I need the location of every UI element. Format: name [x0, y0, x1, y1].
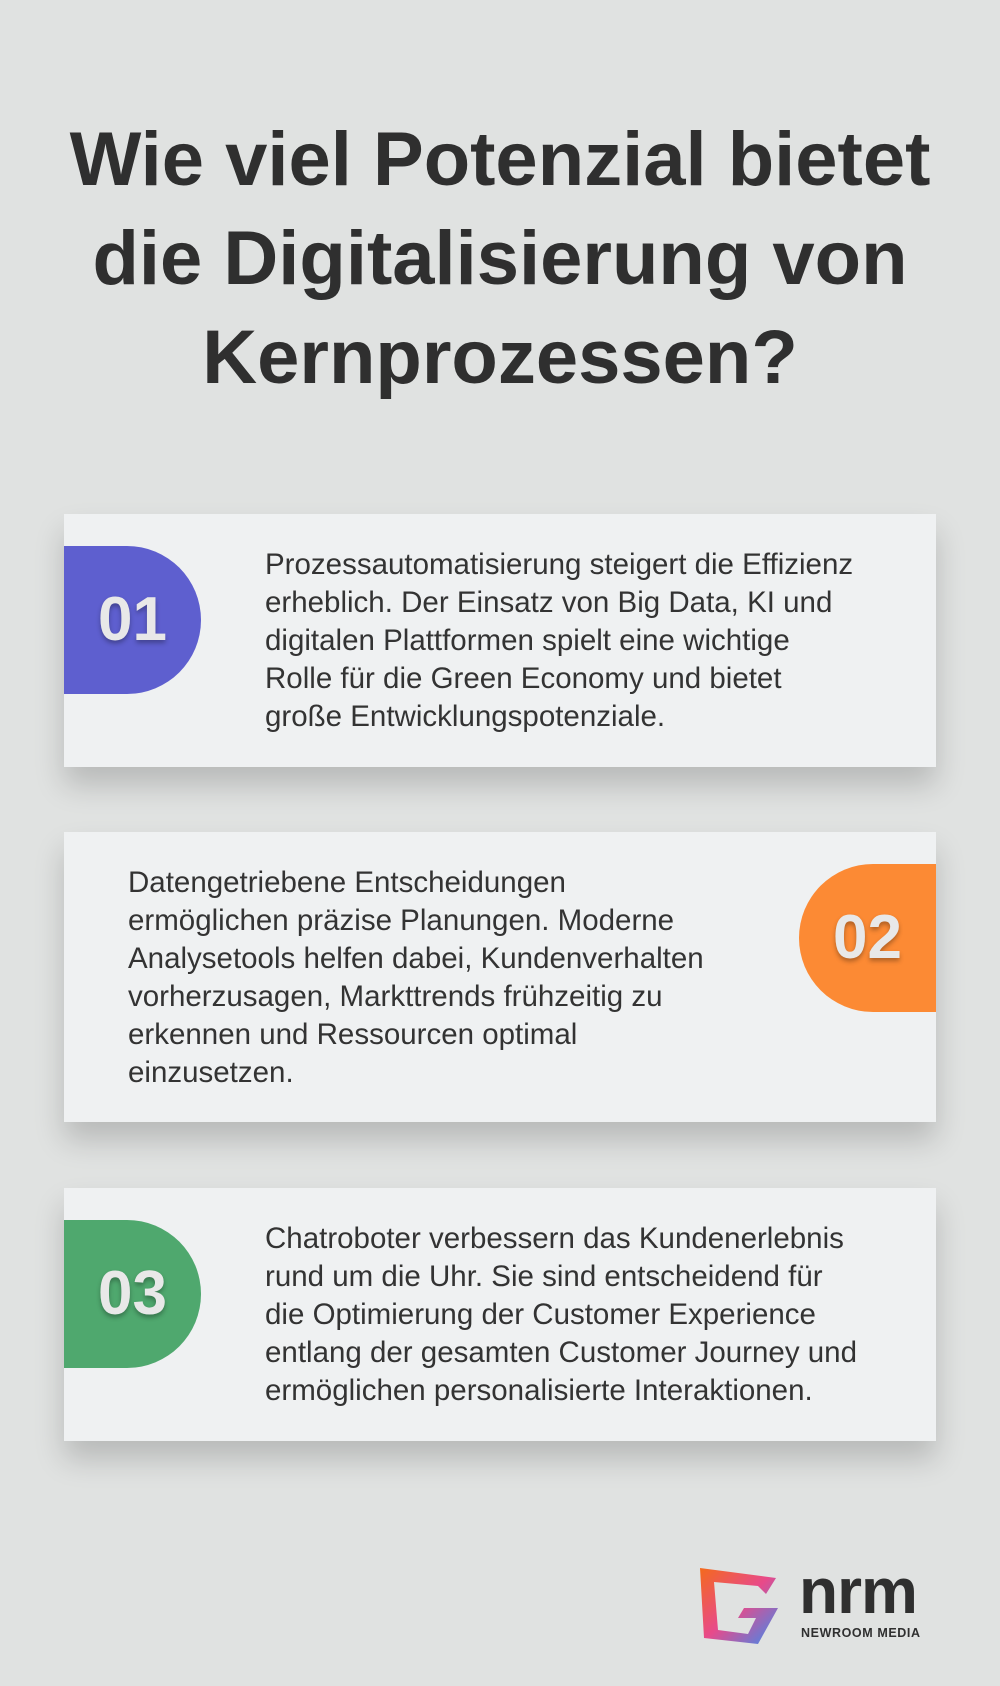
text 02: ermöglichen präzise Planungen. Moderne: [128, 904, 674, 937]
title: die Digitalisierung von: [92, 216, 908, 301]
title: Kernprozessen?: [202, 315, 798, 400]
text 03: die Optimierung der Customer Experience: [265, 1298, 816, 1331]
logo text: nrm: [799, 1555, 917, 1627]
logo: [700, 1555, 921, 1644]
text 01: erheblich. Der Einsatz von Big Data, KI und: [265, 586, 832, 619]
badge 01: 01: [98, 585, 167, 654]
text 02: vorherzusagen, Markttrends frühzeitig zu: [128, 980, 663, 1013]
text 02: Datengetriebene Entscheidungen: [128, 866, 566, 899]
logo icon: [700, 1568, 778, 1644]
text 01: digitalen Plattformen spielt eine wichtige: [265, 624, 790, 657]
panel: 03: [64, 1188, 936, 1441]
text 03: ermöglichen personalisierte Interaktionen.: [265, 1374, 813, 1407]
title: [70, 117, 930, 400]
text 03: Chatroboter verbessern das Kundenerlebnis: [265, 1222, 844, 1255]
text 02: erkennen und Ressourcen optimal: [128, 1018, 577, 1051]
badge 03: [64, 1220, 201, 1368]
text 03: entlang der gesamten Customer Journey und: [265, 1336, 857, 1369]
badge 03: 03: [98, 1259, 167, 1328]
logo: NEWROOM MEDIA: [801, 1626, 921, 1640]
badge 02: [799, 864, 936, 1012]
text 03: [265, 1222, 857, 1407]
panel: 02: [64, 832, 936, 1122]
text 01: [265, 548, 853, 733]
text 02: Analysetools helfen dabei, Kundenverhalten: [128, 942, 704, 975]
badge 02: 02: [833, 903, 902, 972]
text 03: rund um die Uhr. Sie sind entscheidend für: [265, 1260, 823, 1293]
panel: 01: [64, 514, 936, 767]
text 02: einzusetzen.: [128, 1056, 294, 1089]
title: Wie viel Potenzial bietet: [70, 117, 930, 202]
text 01: Rolle für die Green Economy und bietet: [265, 662, 782, 695]
text 02: [128, 866, 704, 1089]
text 01: Prozessautomatisierung steigert die Effizienz: [265, 548, 853, 581]
text 01: große Entwicklungspotenziale.: [265, 700, 665, 733]
badge 01: [64, 546, 201, 694]
